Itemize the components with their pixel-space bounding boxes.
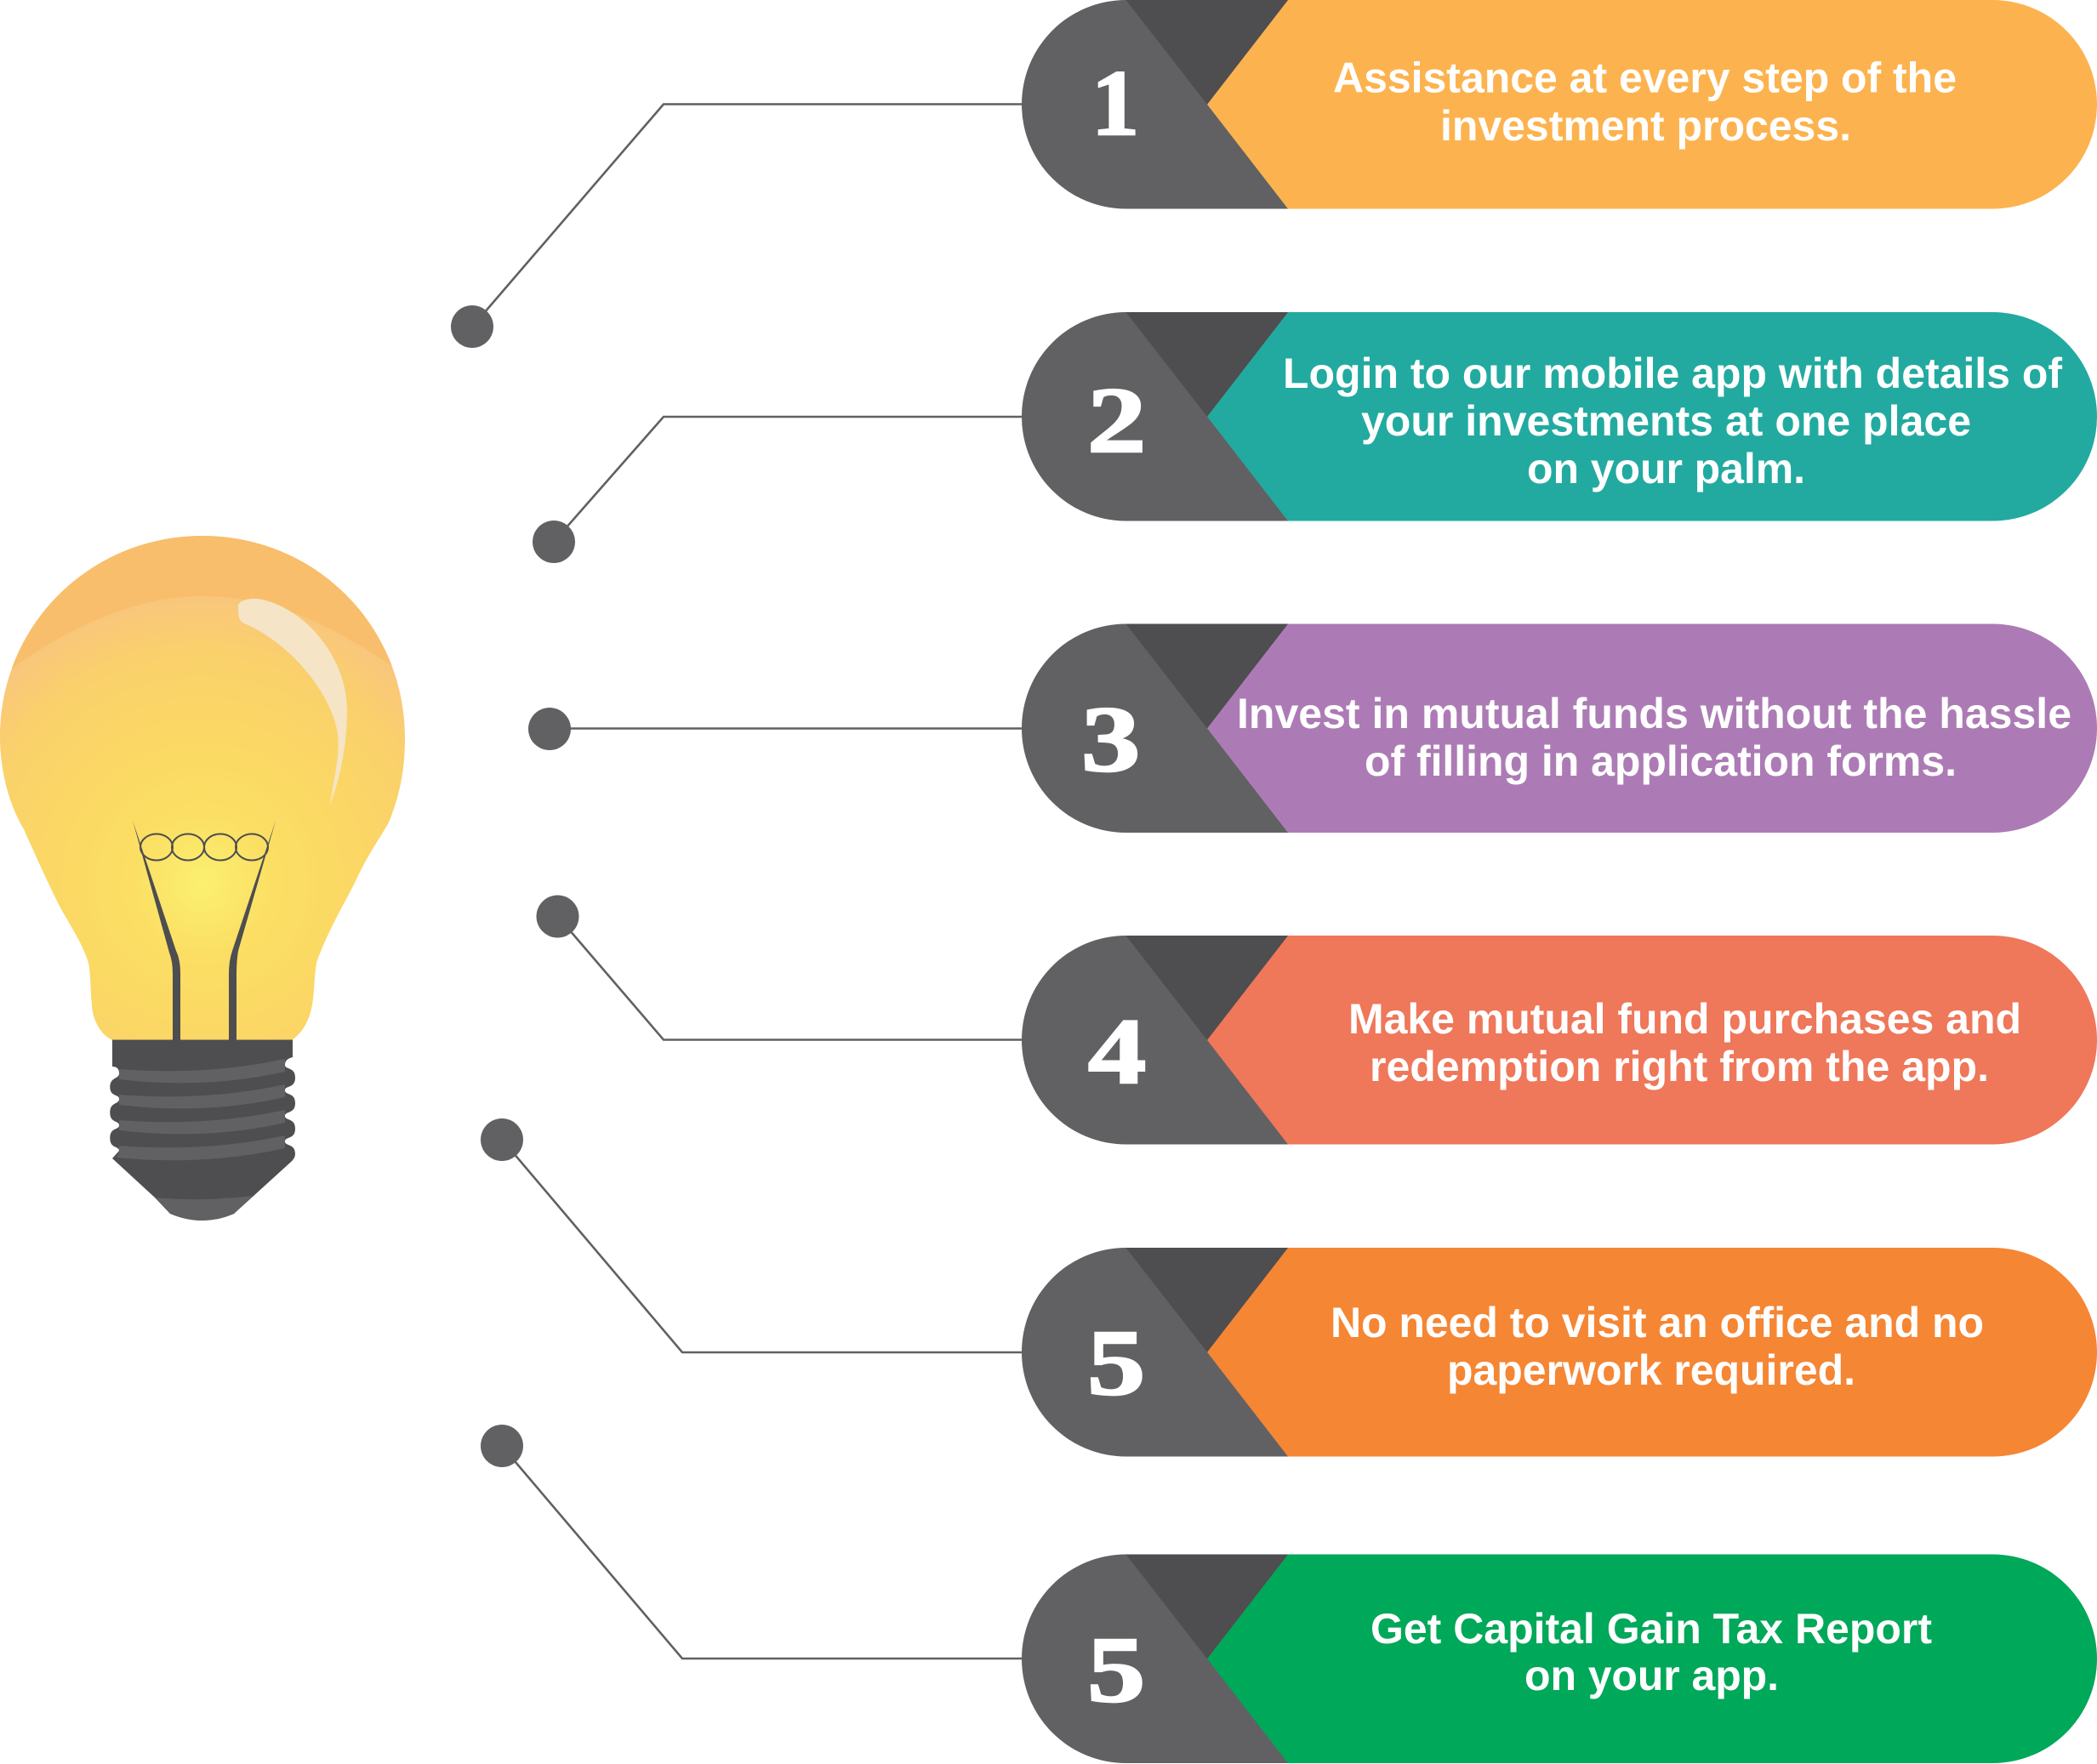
connector 6 <box>481 1425 1023 1659</box>
connector 2 <box>533 417 1023 563</box>
number 2: 2 <box>1087 369 1146 473</box>
connector 1 <box>451 104 1023 348</box>
text 6: on your app. <box>1524 1652 1779 1699</box>
bulb top shade <box>12 536 392 669</box>
text 2: on your palm. <box>1527 445 1805 492</box>
text 3: of filling in application forms. <box>1365 737 1957 785</box>
pill 5 <box>1022 1248 2097 1456</box>
text 4: redemption right from the app. <box>1370 1043 1989 1090</box>
text 6: Get Capital Gain Tax Report <box>1370 1605 1932 1653</box>
text 1: Assistance at every step of the <box>1333 54 1957 102</box>
text 1: investment process. <box>1440 102 1851 150</box>
number 4: 4 <box>1088 999 1146 1103</box>
text 5: No need to visit an office and no <box>1331 1299 1984 1346</box>
number 5: 5 <box>1087 1311 1145 1414</box>
connector 3 <box>528 708 1023 750</box>
connector 5 <box>481 1118 1023 1352</box>
pill 3 <box>1022 624 2097 833</box>
number 1: 1 <box>1091 52 1139 156</box>
text 4: Make mutual fund purchases and <box>1348 995 2021 1043</box>
pill 2 <box>1022 312 2097 521</box>
connector 4 <box>536 895 1023 1039</box>
number 3: 3 <box>1081 688 1140 792</box>
pill 1 <box>1022 0 2097 209</box>
text 2: Login to our mobile app with details of <box>1283 350 2062 397</box>
base tip <box>155 1196 253 1221</box>
text 3: Invest in mutual funds without the hassle <box>1237 690 2071 737</box>
base thread bands <box>117 1059 285 1160</box>
text 2: your investments at one place <box>1361 397 1971 445</box>
text 5: paperwork required. <box>1447 1346 1855 1394</box>
bulb highlight <box>238 599 347 805</box>
number 5 (second): 5 <box>1087 1618 1145 1721</box>
pill 6 <box>1022 1555 2097 1763</box>
light bulb illustration <box>0 534 405 1221</box>
screw base <box>110 1039 295 1221</box>
filament <box>133 821 276 1040</box>
bulb glass <box>0 536 405 1040</box>
pill 4 <box>1022 936 2097 1145</box>
